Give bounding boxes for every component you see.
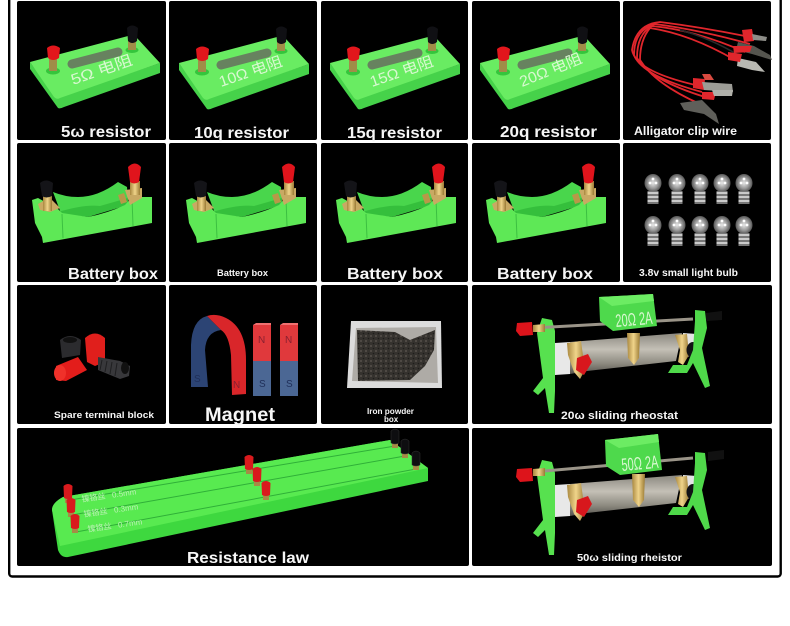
icon: 10 ohm resistor board: 10Ω 电阻	[217, 53, 285, 91]
label: Battery box: Battery box	[497, 266, 593, 283]
panel: iron powder box	[321, 285, 468, 424]
icon: horseshoe magnet	[191, 315, 246, 395]
label: Alligator clip wire: Alligator clip wire	[634, 126, 737, 138]
label: Iron powder box: box	[384, 415, 399, 424]
icon: bar magnet 2: S	[286, 379, 293, 390]
icon: horseshoe magnet: N	[233, 380, 240, 391]
label: 15q resistor: 15q resistor	[347, 125, 442, 142]
label: Iron powder box: Iron powder	[367, 407, 414, 416]
icon: battery box	[186, 164, 306, 243]
panel: 20 ohm sliding rheostat	[472, 285, 772, 424]
icon: battery box	[32, 164, 152, 243]
icon: four terminal caps	[54, 334, 130, 381]
icon: ten small light bulbs	[644, 174, 752, 246]
label: 3.8v small light bulb: 3.8v small light bulb	[639, 268, 738, 279]
panel: 10 ohm resistor	[169, 1, 317, 142]
icon: bar magnet 2: N	[285, 335, 292, 346]
icon: bar magnet 2	[280, 323, 298, 396]
panel: magnet	[169, 285, 317, 426]
label: Spare terminal block: Spare terminal block	[54, 410, 155, 421]
panel: battery box 4	[472, 143, 620, 283]
icon: 20 ohm resistor board	[480, 26, 610, 109]
label: 20ω sliding rheostat: 20ω sliding rheostat	[561, 410, 678, 422]
icon: 50 ohm sliding rheostat: 50Ω 2A	[621, 452, 659, 475]
panel: 50 ohm sliding rheostat	[472, 428, 772, 566]
icon: battery box	[486, 164, 606, 243]
icon: battery box	[336, 164, 456, 243]
icon: 15 ohm resistor board	[330, 26, 460, 109]
panel: spare terminal block	[17, 285, 166, 424]
icon: transparent box of iron powder	[347, 321, 442, 388]
panel: alligator clip wire	[623, 1, 772, 140]
icon: bar magnet 1: S	[259, 379, 266, 390]
icon: 5 ohm resistor board: 5Ω 电阻	[69, 52, 135, 89]
panel: battery box 2	[169, 143, 317, 282]
icon: 10 ohm resistor board	[179, 26, 309, 109]
panel: battery box 3	[321, 143, 468, 283]
icon: resistance law board: 镍铬丝 0.3mm	[83, 501, 139, 519]
label: Resistance law: Resistance law	[187, 550, 310, 567]
icon: 20 ohm resistor board: 20Ω 电阻	[517, 50, 585, 91]
label: 20q resistor: 20q resistor	[500, 124, 597, 141]
panel: small light bulbs	[623, 143, 771, 282]
icon: bar magnet 1	[253, 323, 271, 396]
icon: 15 ohm resistor board: 15Ω 电阻	[368, 53, 436, 91]
icon: bundle of alligator clip wires	[632, 22, 772, 124]
icon: 5 ohm resistor board	[30, 26, 160, 108]
label: 50ω sliding rheistor: 50ω sliding rheistor	[577, 552, 682, 564]
label: 5ω resistor: 5ω resistor	[61, 124, 151, 141]
icon: bar magnet 1: N	[258, 335, 265, 346]
icon: horseshoe magnet: S	[194, 374, 201, 385]
panel: resistance law	[17, 428, 469, 567]
label: Magnet: Magnet	[205, 405, 276, 426]
icon: resistance law board: 镍铬丝 0.7mm	[87, 516, 143, 534]
icon: 50 ohm sliding rheostat	[516, 434, 724, 555]
label: Battery box: Battery box	[347, 266, 443, 283]
label: 10q resistor: 10q resistor	[194, 125, 289, 142]
icon: 20 ohm sliding rheostat	[516, 294, 722, 413]
label: Battery box: Battery box	[68, 266, 158, 283]
panel: 5 ohm resistor	[17, 1, 166, 141]
icon: 20 ohm sliding rheostat: 20Ω 2A	[615, 308, 653, 331]
label: Battery box small: Battery box	[217, 268, 268, 278]
icon: resistance law board	[52, 429, 428, 557]
panel: 15 ohm resistor	[321, 1, 468, 142]
icon: resistance law board: 镍铬丝 0.5mm	[81, 486, 137, 504]
panel: 20 ohm resistor	[472, 1, 620, 141]
panel: battery box 1	[17, 143, 166, 283]
